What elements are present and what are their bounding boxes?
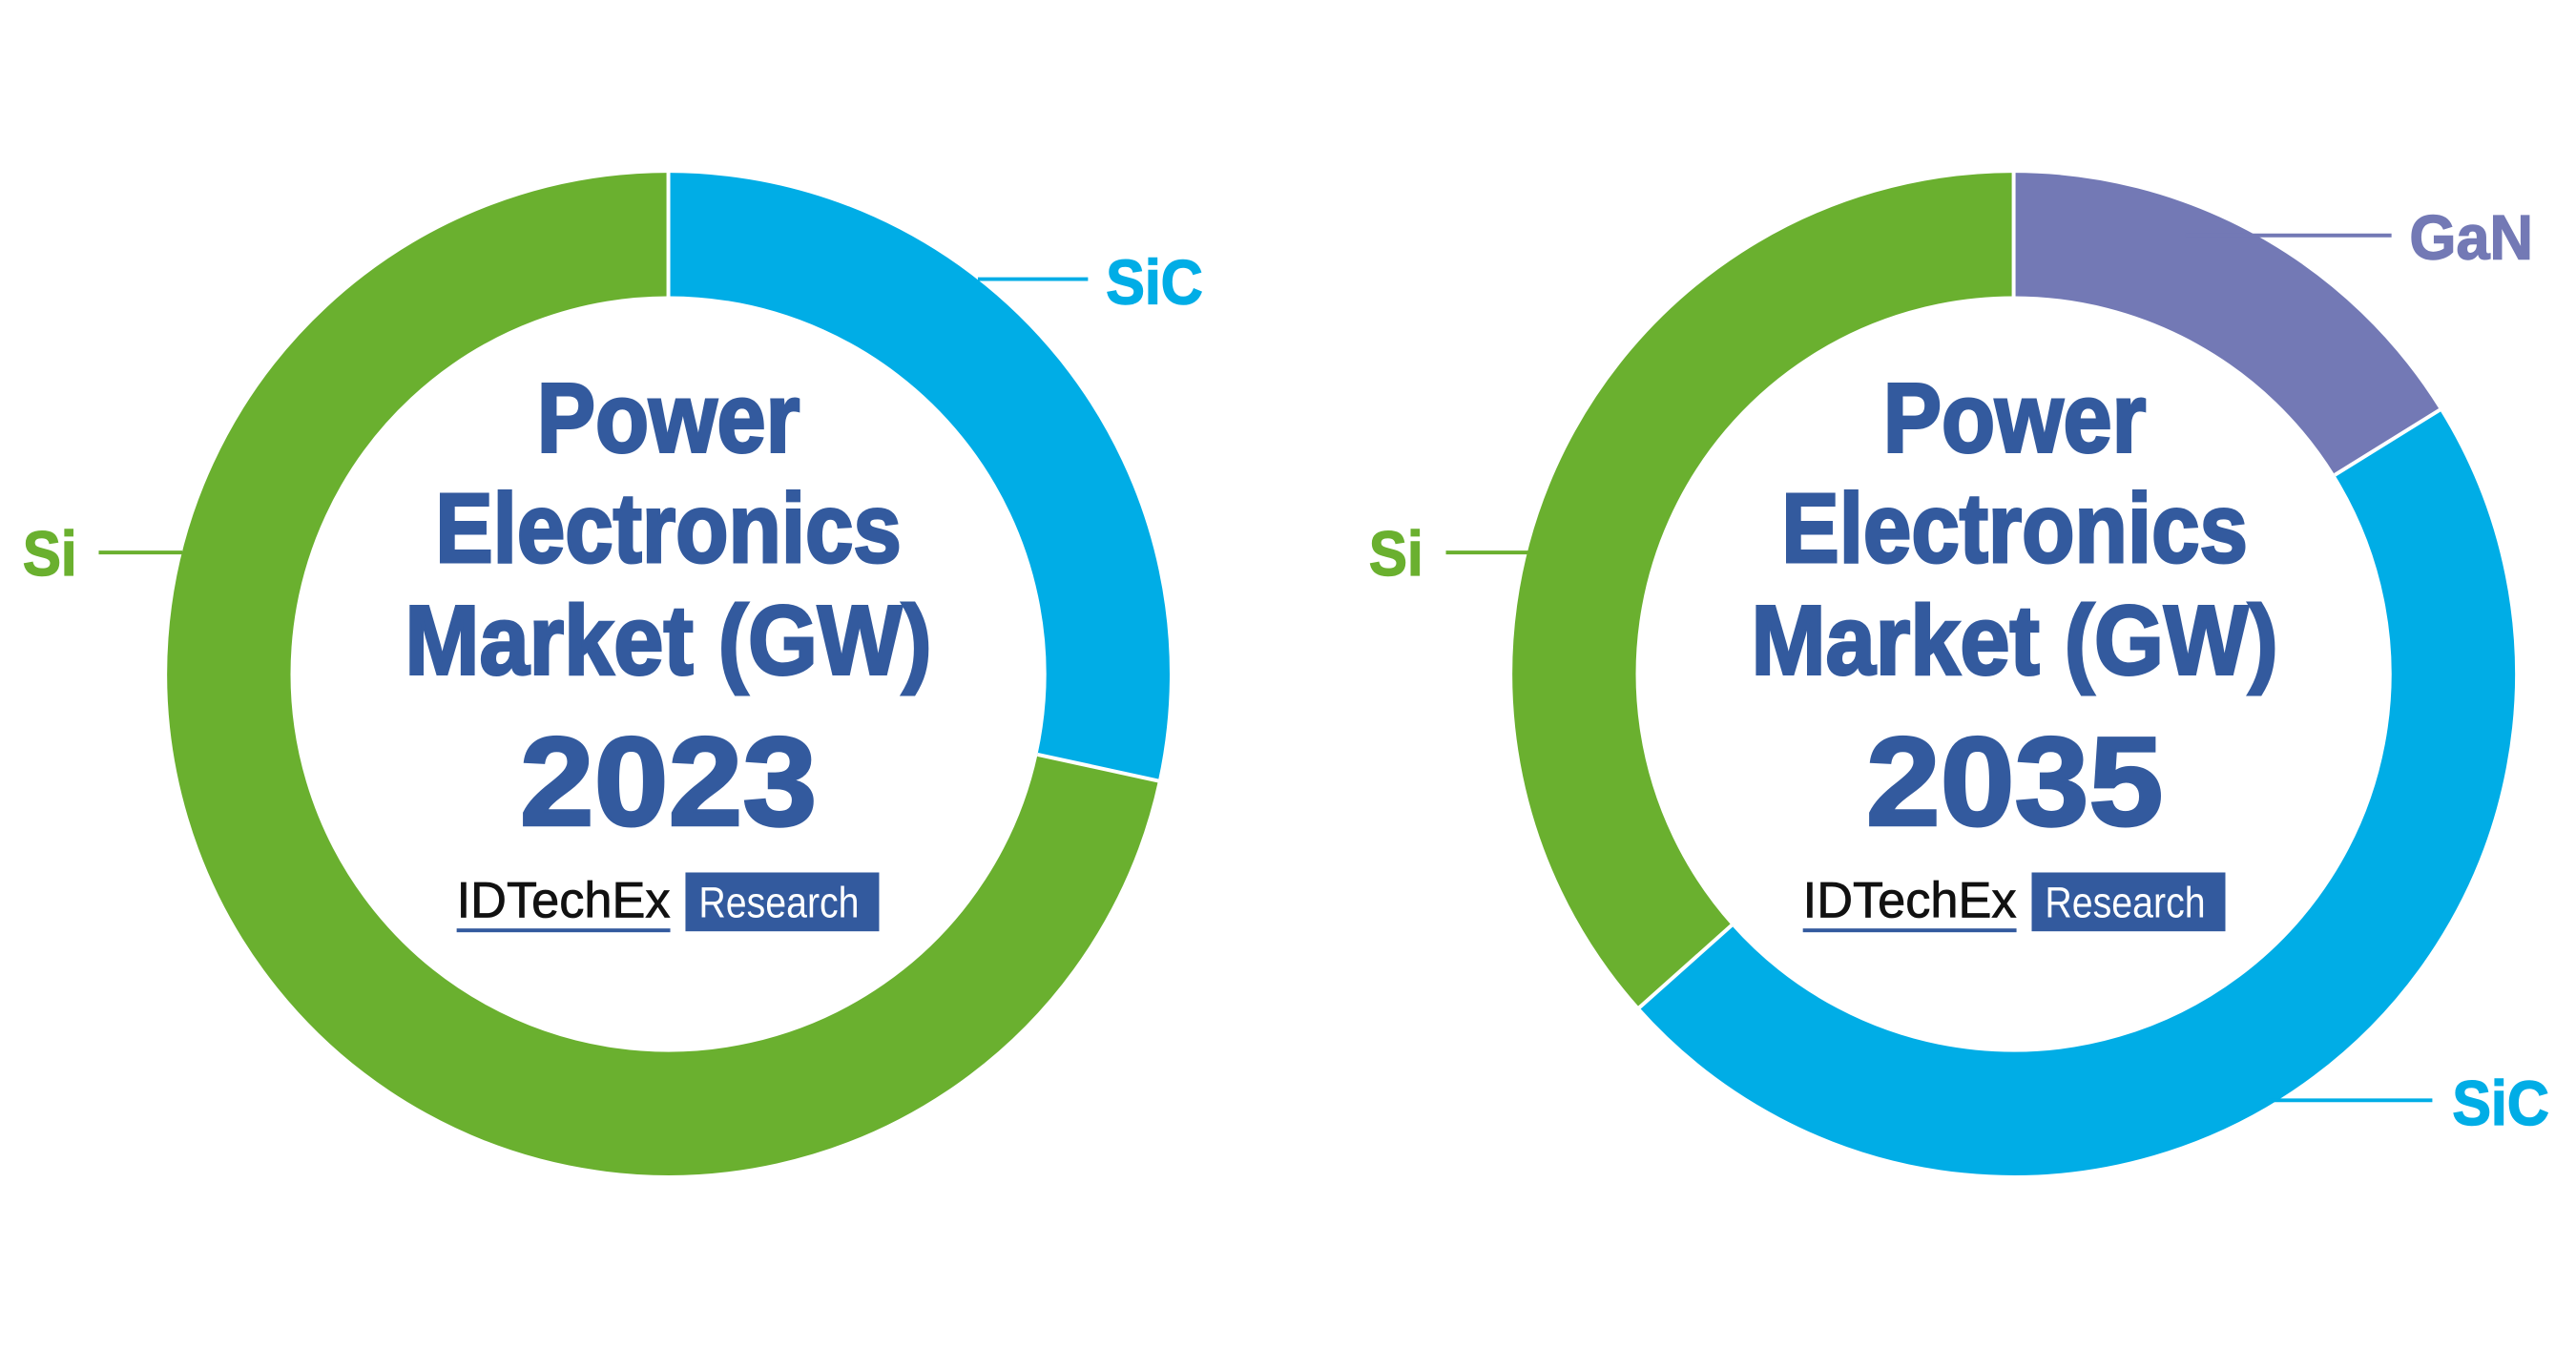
title 2023: Market (GW): [405, 585, 932, 695]
title 2035: Electronics: [1781, 472, 2248, 583]
logo 2035: Research: [2045, 878, 2206, 926]
label: SiC 2035: SiC: [2452, 1069, 2549, 1138]
title 2023: Power: [537, 363, 800, 473]
segment: SiC 2023: [669, 235, 1108, 768]
title 2023: [405, 363, 932, 853]
segment: Si 2035: [1574, 235, 2014, 966]
donut chart: 2023: [229, 171, 1159, 1113]
title 2023: Electronics: [435, 472, 902, 583]
logo 2023: IDTechEx: [457, 872, 671, 928]
label: SiC 2023: SiC: [1106, 247, 1203, 317]
title 2035: 2035: [1866, 712, 2163, 853]
title 2035: [1751, 363, 2278, 853]
label: Si 2035: Si: [1369, 519, 1423, 589]
logo 2023: Research: [698, 878, 860, 926]
logo 2023: [457, 872, 879, 932]
segment: Si 2023: [229, 235, 1098, 1113]
donut chart: 2035: [1574, 171, 2453, 1113]
label: GaN 2035: GaN: [2410, 203, 2533, 273]
logo 2035: IDTechEx: [1803, 872, 2017, 928]
segment: SiC 2035: [1686, 443, 2453, 1113]
segment: GaN 2035: [2014, 235, 2387, 443]
logo 2035: [1803, 872, 2225, 932]
title 2035: Market (GW): [1751, 585, 2278, 695]
title 2023: 2023: [520, 712, 817, 853]
label: Si 2023: Si: [23, 519, 77, 589]
title 2035: Power: [1883, 363, 2146, 473]
